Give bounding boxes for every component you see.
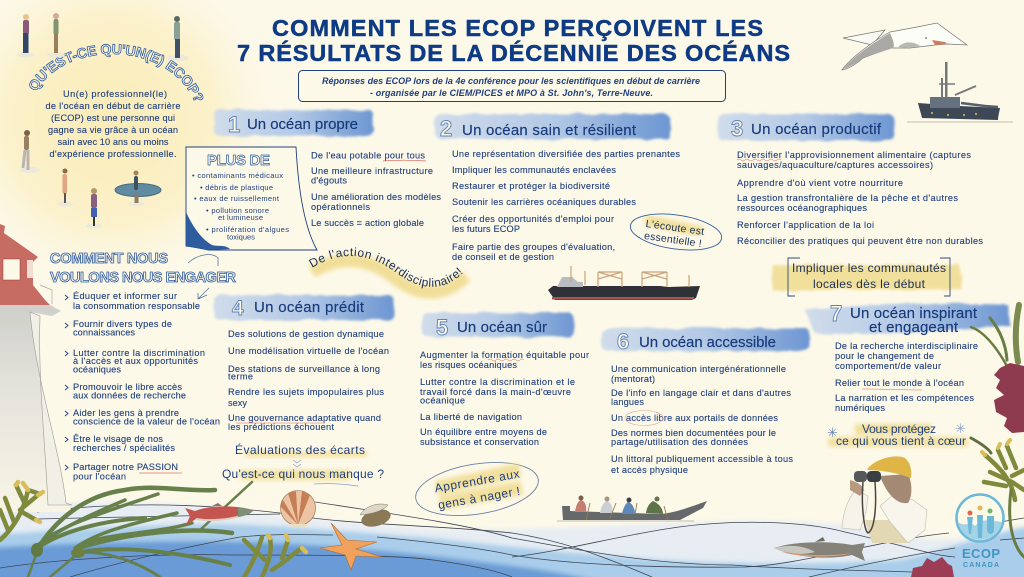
list: engagement: Fournir divers types de [73,319,172,329]
list 1: Le succès = action globale [311,218,424,228]
list 4: Une modélisation virtuelle de l'océan [228,346,389,356]
list 6: Un littoral publiquement accessible à tous [611,454,793,464]
callout: listening: essentielle ! [643,230,702,250]
card: plus de: PLUS DE [207,152,270,169]
list 2: Faire partie des groupes d'évaluation, [452,242,615,252]
callout: you protect [827,421,968,448]
list 3: Réconcilier des pratiques qui peuvent être non durables [737,236,983,246]
heading 1: 1 [228,112,240,137]
illustration: canoe [557,496,707,521]
heading 5 [422,313,574,340]
panel: 4 predicted ocean [214,295,394,486]
list 6: partage/utilisation des données [611,437,748,447]
illustration: left fucus [0,482,43,540]
list 6: (mentorat) [611,374,655,384]
list: engagement: Être le visage de nos [73,434,163,444]
list 5: Augmenter la formation équitable pour [420,350,589,360]
subtitle box: - organisée par le CIEM/PICES et MPO à St. John's, Terre-Neuve. [370,88,653,98]
list 5: les risques océaniques [420,360,517,370]
list 5: océanique [420,396,465,406]
definition text: (ECOP) est une personne qui [51,113,175,123]
callout: swim: Apprendre aux [433,467,521,495]
list 4: Des solutions de gestion dynamique [228,329,384,339]
list: engagement [65,291,220,482]
list 7: Relier tout le monde à l'océan [835,378,964,388]
heading 7: et engageant [869,319,959,336]
list: engagement: océaniques [73,364,121,374]
illustration: observer with binoculars [842,456,927,543]
gap evaluation [222,442,384,486]
illustration: middle fucus [244,535,306,577]
card: plus de: et lumineuse [218,213,263,222]
heading 2: 2 [440,116,452,141]
list 4: Une gouvernance adaptative quand [228,413,381,423]
definition text: d'expérience professionnelle. [50,149,176,159]
panel: 6 accessible ocean [602,328,810,475]
list 6 [611,364,793,475]
list 6: Un accès libre aux portails de données [611,413,778,423]
heading 7 [805,301,1010,336]
panel: 7 inspiring ocean [805,301,1010,448]
list 1: Une amélioration des modèles [311,192,441,202]
callout: listening [628,209,724,255]
list 6: langues [611,397,644,407]
list 6: De l'info en langage clair et dans d'autres [611,388,791,398]
list 3 [737,150,983,246]
definition text: Un(e) professionnel(le) [63,89,167,99]
callout: involve communities: locales dès le début [813,277,926,291]
subtitle box [298,70,726,102]
list: engagement: Partager notre PASSION [73,462,178,472]
wave lines [0,502,1024,577]
list 7: La narration et les compétences [835,393,974,403]
list: engagement: la consommation responsable [73,301,200,311]
card: plus de: • pollution sonore [206,206,269,215]
callout: interdisciplinary: De l'action interdisciplinaire! [308,247,463,288]
icons: people [17,13,189,228]
list: engagement: Éduquer et informer sur [73,291,177,301]
list 1: Une meilleure infrastructure [311,166,433,176]
list: engagement: conscience de la valeur de l'océan [73,416,220,426]
heading: arc: QU'EST-CE QU'UN(E) ECOP? [29,44,204,101]
list 5 [420,350,589,447]
list 1: d'égouts [311,176,347,186]
heading 5: 5 [436,315,448,340]
list 7: comportement/de valeur [835,361,941,371]
list 6: et accès physique [611,465,688,475]
title [237,15,790,66]
heading 2: Un océan sain et résilient [462,122,637,139]
definition text: de l'océan en début de carrière [46,101,180,111]
heading 5: Un océan sûr [457,319,547,336]
heading 7: Un océan inspirant [850,305,978,322]
list 1 [311,150,441,228]
list 1: opérationnels [311,202,370,212]
list 2: Créer des opportunités d'emploi pour [452,214,614,224]
list: engagement: Lutter contre la discrimination [73,348,205,358]
list 2: de conseil et de gestion [452,252,554,262]
heading 3: 3 [731,116,743,141]
card: plus de: • débris de plastique [200,183,273,192]
illustration: clam [359,504,393,530]
callout: you protect: ✳ [955,421,966,436]
list: engagement: Aider les gens à prendre [73,408,179,418]
list 2 [452,149,680,262]
list 7: numériques [835,403,885,413]
list: engagement: aux données de recherche [73,390,186,400]
list 2: Soutenir les carrières océaniques durables [452,197,636,207]
heading: how we want to engage: COMMENT NOUS [50,251,168,267]
callout: you protect: ✳ [827,425,838,440]
heading 6 [602,328,810,354]
illustration: gull [842,23,967,70]
list 4: terme [228,372,253,382]
heading: how we want to engage [50,251,237,299]
list 3: La gestion transfrontalière de la pêche et d'autres [737,193,958,203]
definition text: sain avec 10 ans ou moins [58,137,169,147]
card: plus de: toxiques [227,232,255,242]
callout: listening: L'écoute est [645,218,705,238]
logo: ECOP Canada [956,494,1004,569]
list 5: Lutter contre la discrimination et le [420,377,575,387]
list 3: sauvages/aquaculture/captures accessoires) [737,160,933,170]
list 6: Des normes bien documentées pour le [611,428,776,438]
list 7: pour le changement de [835,351,934,361]
list: engagement: recherches / spécialités [73,443,175,453]
logo: ECOP Canada: CANADA [963,562,999,569]
definition text [46,89,180,159]
illustration: lighthouse [0,224,74,512]
illustration: red seaweed [911,557,954,577]
list 7: De la recherche interdisciplinaire [835,341,978,351]
panel: 5 safe ocean [412,313,589,523]
logo: ECOP Canada: ECOP [962,546,1000,561]
panel: what is an ECOP [17,13,204,228]
heading 7: 7 [830,301,842,326]
heading 1 [214,110,374,137]
illustration: trout [774,537,865,561]
callout: you protect: Vous protégez [862,422,936,436]
heading 4 [214,295,394,320]
callout: involve communities [772,258,962,296]
list 4: sexy [228,398,247,408]
list 5: Un équilibre entre moyens de [420,427,547,437]
heading 6: Un océan accessible [639,334,776,351]
list 3: ressources océanographiques [737,203,867,213]
heading 2 [435,114,670,141]
panel: 1 clean ocean [186,110,441,250]
illustration: salmon [185,503,253,525]
subtitle box: Réponses des ECOP lors de la 4e conférence pour les scientifiques en début de carrière [322,76,700,86]
callout: you protect: ce qui vous tient à cœur [836,434,966,448]
list 2: Impliquer les communautés enclavées [452,165,616,175]
illustration: fishing boat [907,62,1013,122]
list 6: Une communication intergénérationnelle [611,364,786,374]
list 2: Une représentation diversifiée des parties prenantes [452,149,680,159]
list: engagement: connaissances [73,328,135,338]
heading 3: Un océan productif [751,121,882,138]
title: COMMENT LES ECOP PERÇOIVENT LES [272,15,763,41]
list 3: Renforcer l'application de la loi [737,220,874,230]
gap evaluation: Qu'est-ce qui nous manque ? [222,467,384,481]
list 1: De l'eau potable pour tous [311,150,425,160]
list 7 [835,341,978,413]
heading 6: 6 [617,329,629,354]
illustration: right seaweed [971,305,1024,557]
callout: involve communities: Impliquer les communautés [792,261,946,275]
definition text: gagne sa vie grâce à un océan [48,125,178,135]
illustration: long kelp [28,482,252,577]
heading 1: Un océan propre [247,116,358,133]
list: engagement: Promouvoir le libre accès [73,382,182,392]
card: plus de [186,147,317,250]
illustration: starfish [320,523,382,570]
illustration: scallop [280,490,316,527]
list 4 [228,329,389,432]
list 4: Rendre les sujets impopulaires plus [228,387,384,397]
illustration: cargo ship [548,266,700,300]
card: plus de: • contaminants médicaux [192,171,283,180]
list: engagement: à l'accès et aux opportunités [73,356,198,366]
list 3: Apprendre d'où vient votre nourriture [737,178,903,188]
panel: 3 productive ocean [718,114,983,296]
list 4: les prédictions échouent [228,422,334,432]
heading: how we want to engage: VOULONS NOUS ENGAGER [50,270,237,286]
list 3: Diversifier l'approvisionnement alimentaire (captures [737,150,971,160]
callout: swim [412,455,542,523]
list 2: les futurs ECOP [452,224,520,234]
list: engagement: pour l'océan [73,472,126,482]
title: 7 RÉSULTATS DE LA DÉCENNIE DES OCÉANS [237,39,790,66]
list 5: La liberté de navigation [420,412,522,422]
list 5: subsistance et conservation [420,437,539,447]
list 5: travail forcé dans la main-d'œuvre [420,387,571,397]
list 4: Des stations de surveillance à long [228,364,380,374]
callout: swim: gens à nager ! [437,484,521,512]
gap evaluation: Évaluations des écarts [235,442,365,457]
heading 4: Un océan prédit [254,299,365,316]
card: plus de: • prolifération d'algues [206,225,289,234]
list 2: Restaurer et protéger la biodiversité [452,181,610,191]
heading 3 [718,114,894,141]
heading 4: 4 [232,297,244,320]
card: plus de: • eaux de ruissellement [194,194,280,203]
sea wash [0,502,1024,577]
